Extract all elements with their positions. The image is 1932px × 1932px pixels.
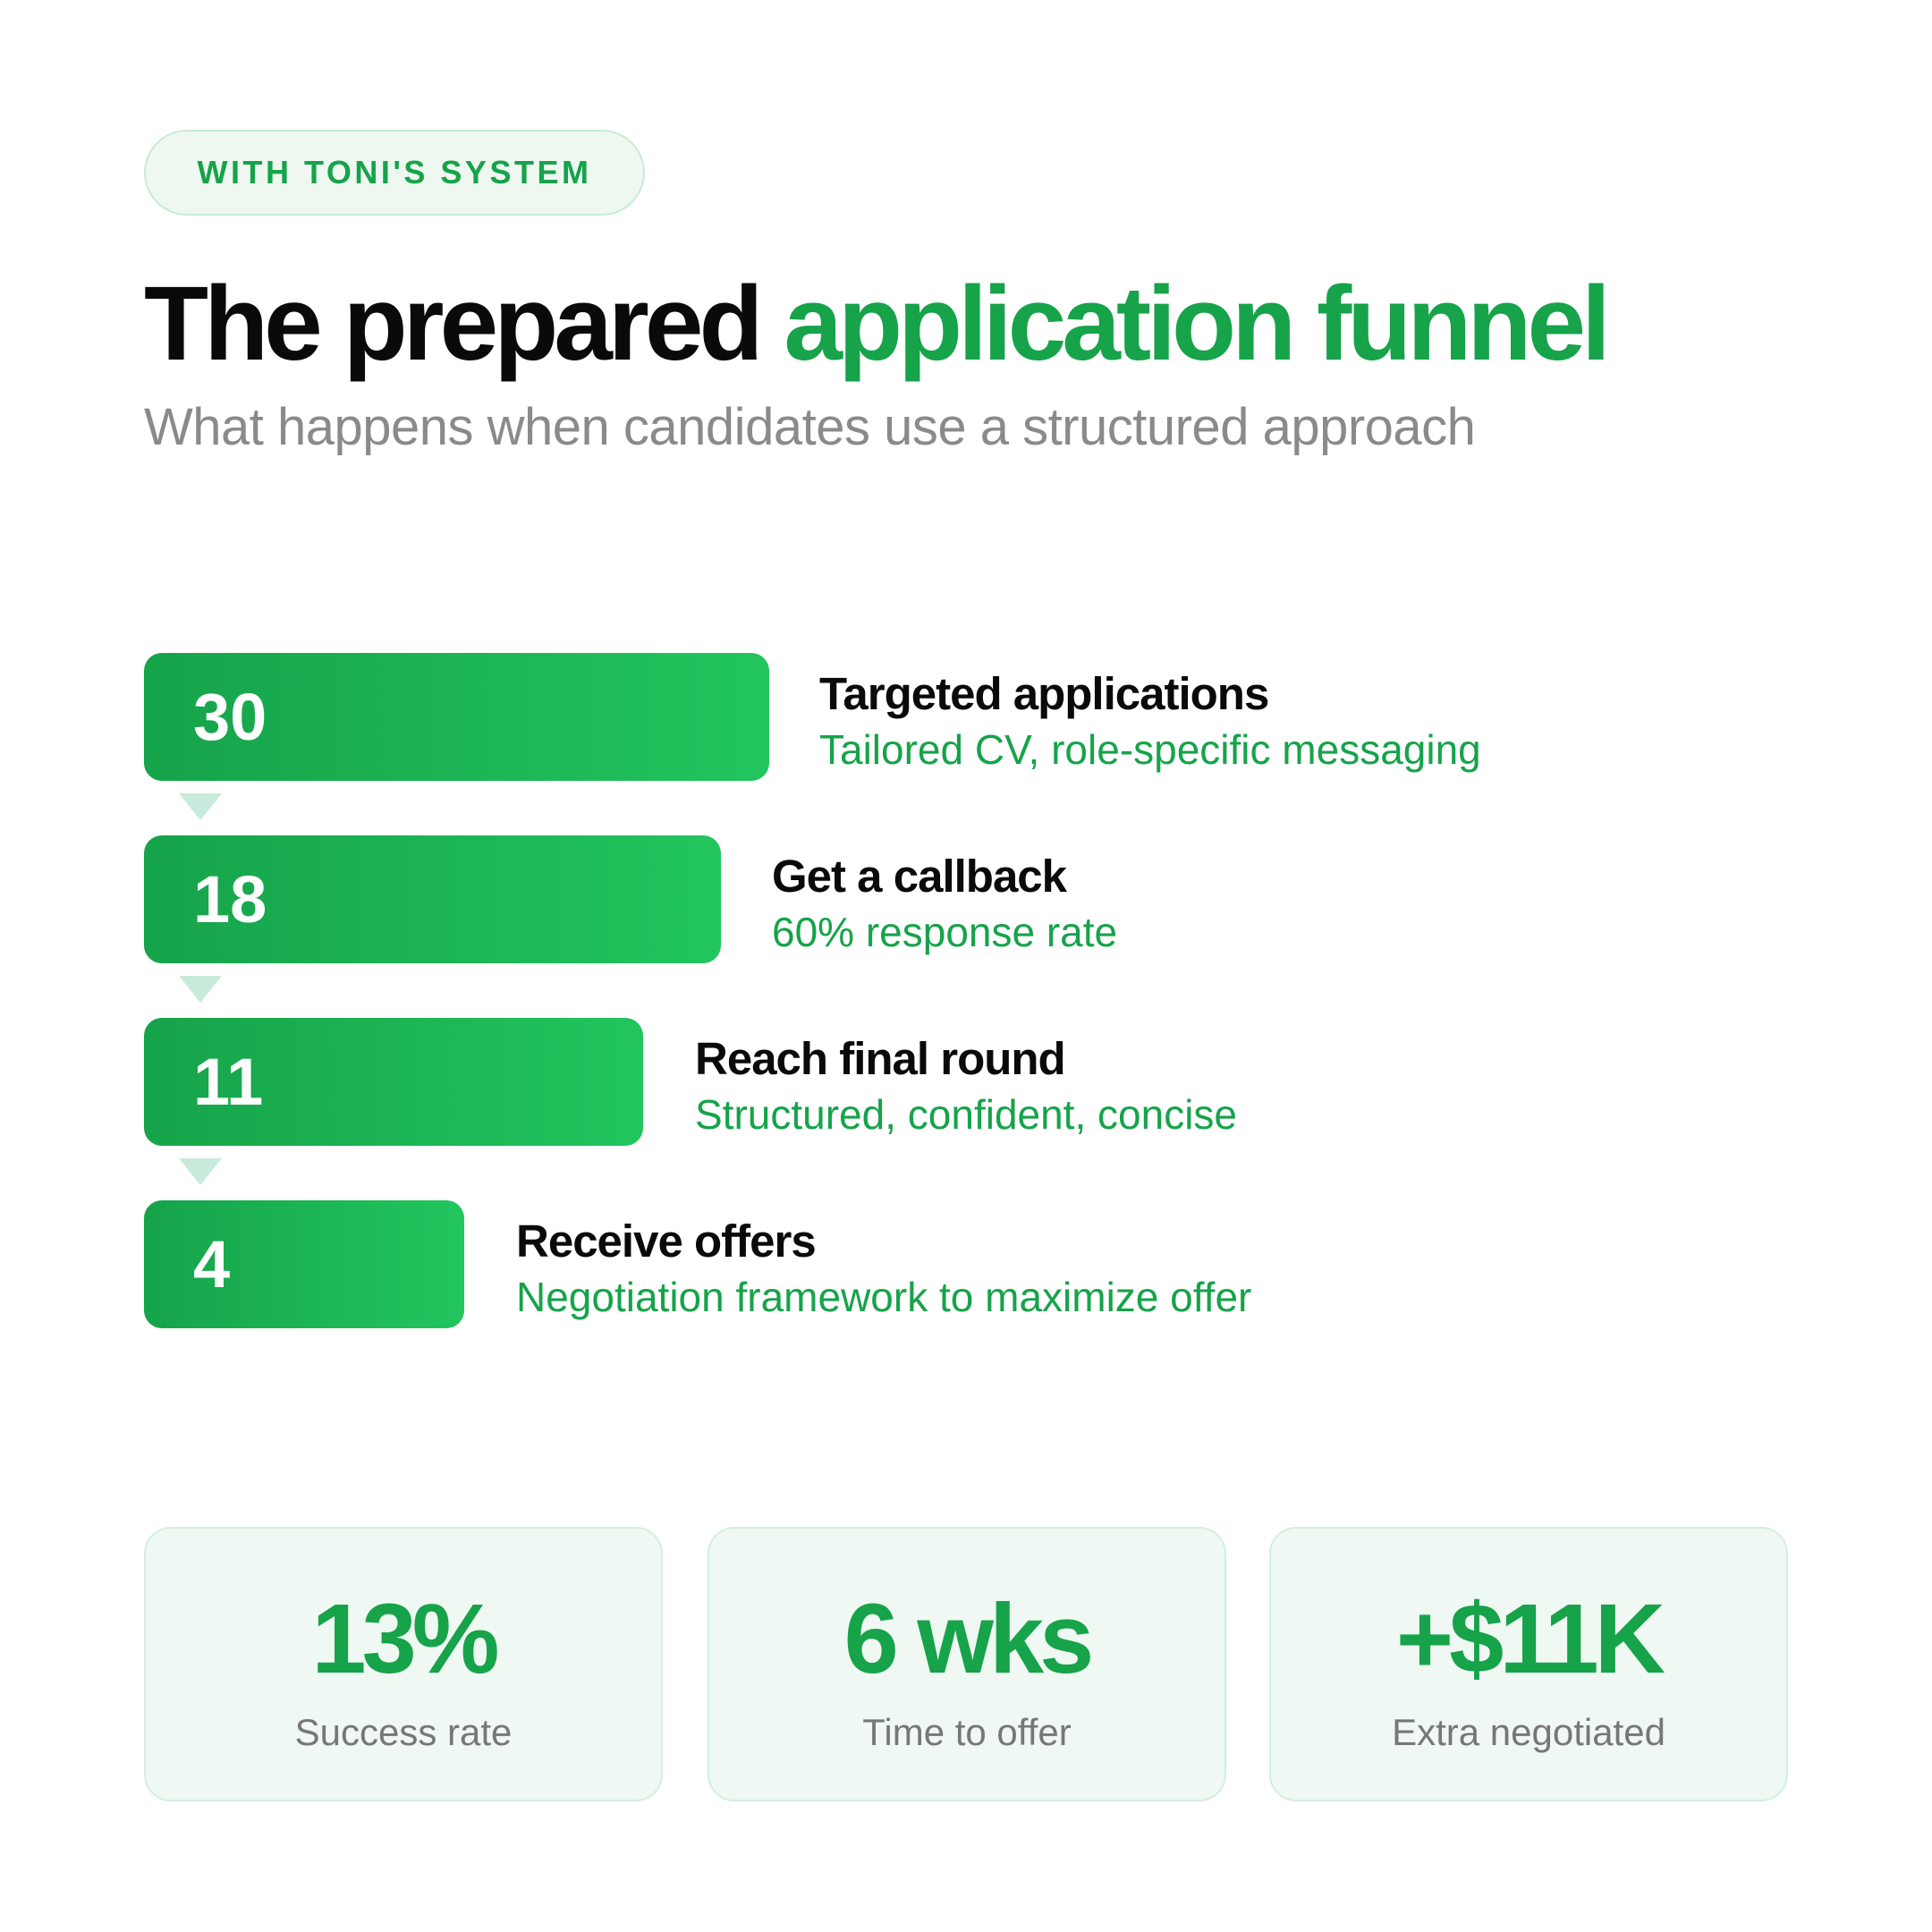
label: targeted applications: Tailored CV, role-specific messaging <box>819 726 1481 773</box>
stat card: time to offer: Time to offer <box>862 1711 1072 1753</box>
stat card: success rate: 13% <box>311 1584 496 1694</box>
bar: 30: 30 <box>193 680 267 754</box>
label: final round: Structured, confident, concise <box>695 1091 1237 1138</box>
badge: WITH TONI'S SYSTEM <box>198 154 591 191</box>
stat card: time to offer: 6 wks <box>844 1584 1089 1694</box>
stat card: extra negotiated: +$11K <box>1396 1584 1661 1694</box>
bar: 18: 18 <box>193 862 267 936</box>
bar: 18 <box>144 835 721 963</box>
bar: 4 <box>144 1200 464 1328</box>
label: offers <box>516 1216 1251 1320</box>
arrow 3 <box>179 1158 222 1185</box>
stat card: time to offer <box>708 1527 1226 1801</box>
subtitle: What happens when candidates use a structured approach <box>144 398 1475 456</box>
label: callback: 60% response rate <box>772 909 1117 955</box>
stat card: extra negotiated: Extra negotiated <box>1392 1711 1665 1753</box>
badge <box>144 130 645 216</box>
bar: 30 <box>144 653 769 781</box>
label: callback <box>772 851 1117 955</box>
bar: 11: 11 <box>193 1045 263 1119</box>
label: targeted applications <box>819 668 1481 773</box>
stat card: extra negotiated <box>1269 1527 1788 1801</box>
stat card: success rate <box>144 1527 663 1801</box>
label: offers: Receive offers <box>516 1216 816 1267</box>
title: The prepared application funnel <box>144 265 1606 383</box>
label: final round: Reach final round <box>695 1033 1065 1084</box>
label: final round <box>695 1033 1237 1138</box>
bar: 11 <box>144 1018 643 1146</box>
label: targeted applications: Targeted applications <box>819 668 1268 719</box>
arrow 1 <box>179 793 222 820</box>
label: callback: Get a callback <box>772 851 1066 902</box>
label: offers: Negotiation framework to maximize offer <box>516 1274 1251 1320</box>
stat card: success rate: Success rate <box>295 1711 512 1753</box>
bar: 4: 4 <box>193 1227 230 1301</box>
arrow 2 <box>179 976 222 1003</box>
